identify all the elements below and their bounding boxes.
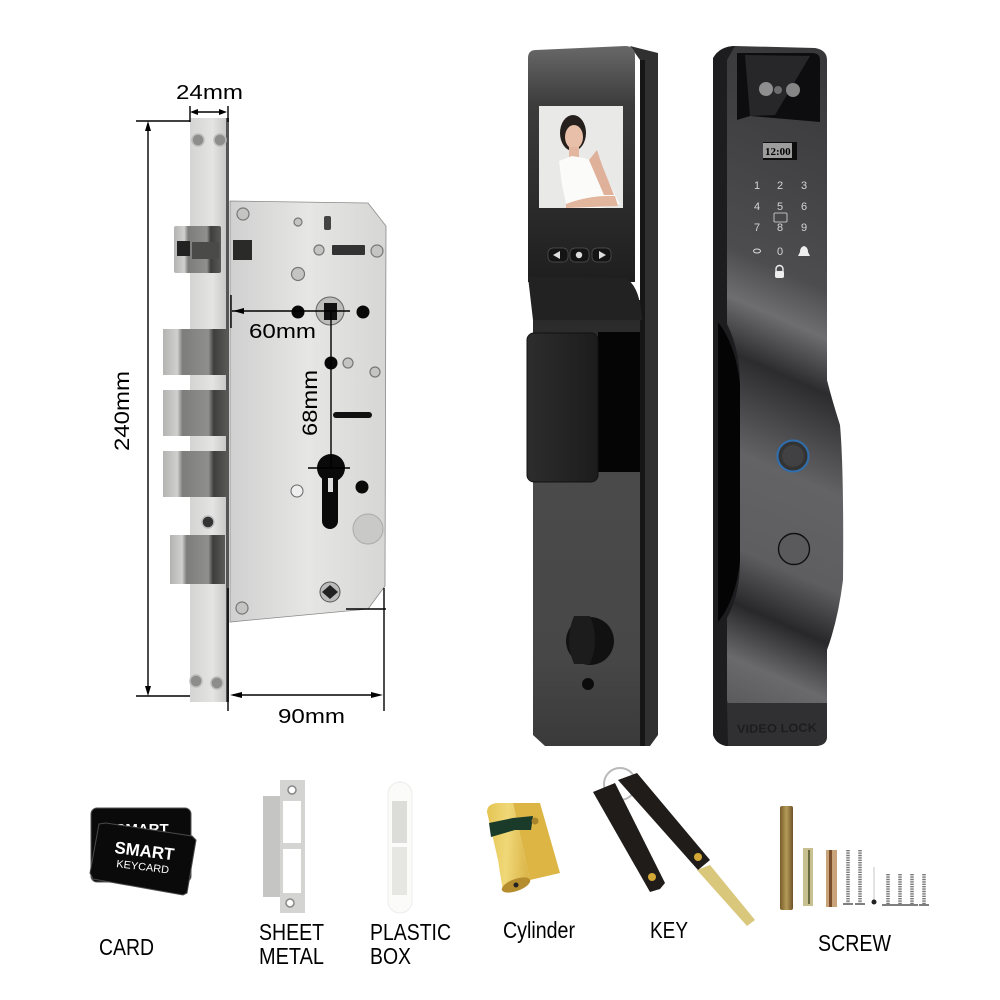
item: sheet metal strike plate bbox=[263, 780, 305, 913]
handle neck hood bbox=[528, 277, 642, 320]
label: plastic box bbox=[370, 919, 451, 969]
faceplate screws bbox=[190, 134, 226, 689]
touch keypad bbox=[754, 180, 807, 258]
key blade bbox=[697, 865, 755, 926]
case screws and openings bbox=[236, 208, 383, 614]
panel: rear lock with keypad and fingerprint bbox=[713, 46, 843, 746]
touch keypad: 1 bbox=[754, 180, 760, 192]
label: screw: SCREW bbox=[818, 930, 891, 956]
emergency keyhole bbox=[582, 678, 594, 690]
label: plastic box: BOX bbox=[370, 943, 411, 969]
lock body bbox=[716, 46, 843, 746]
clock display: 12:00 bbox=[765, 146, 791, 158]
lever handle bbox=[527, 333, 598, 482]
touch keypad: 3 bbox=[801, 180, 807, 192]
touch keypad: 2 bbox=[777, 180, 783, 192]
label: sheet metal: SHEET bbox=[259, 919, 324, 945]
thumb turn bbox=[566, 616, 614, 665]
handle shadow bbox=[598, 332, 640, 472]
top latch bbox=[174, 226, 252, 273]
brand mark: VIDEO LOCK bbox=[737, 721, 817, 736]
left edge strip bbox=[713, 46, 740, 746]
label: 240mm: 240mm bbox=[111, 371, 134, 451]
video screen with portrait bbox=[539, 106, 623, 208]
label: cylinder: Cylinder bbox=[503, 917, 575, 943]
upper screen face bbox=[528, 46, 635, 282]
label: card: CARD bbox=[99, 934, 154, 960]
panel: mortise lock body with dimensions bbox=[111, 82, 386, 728]
touch keypad: 8 bbox=[777, 222, 783, 234]
label: 24mm: 24mm bbox=[176, 82, 243, 104]
lower plate bbox=[533, 300, 640, 746]
clock display bbox=[763, 142, 797, 160]
camera window bbox=[737, 53, 820, 122]
touch keypad: 9 bbox=[801, 222, 807, 234]
label: 60mm: 60mm bbox=[249, 321, 316, 343]
dimension lines bbox=[136, 106, 386, 711]
label: sheet metal bbox=[259, 919, 324, 969]
touch keypad: 5 bbox=[777, 201, 783, 213]
icon: padlock bbox=[775, 266, 784, 278]
item: plastic box bbox=[388, 782, 412, 913]
key arms bbox=[593, 773, 710, 892]
label: 90mm: 90mm bbox=[278, 706, 345, 728]
label: key: KEY bbox=[650, 917, 688, 943]
fingerprint sensor bbox=[778, 440, 808, 472]
item: screws and rods bbox=[780, 806, 929, 910]
front card bbox=[90, 823, 196, 895]
left recess bbox=[718, 322, 740, 622]
label: sheet metal: METAL bbox=[259, 943, 324, 969]
round button bbox=[778, 534, 810, 564]
faceplate bbox=[190, 118, 228, 702]
screen navigation buttons bbox=[548, 248, 611, 262]
touch keypad: 7 bbox=[754, 222, 760, 234]
lock case bbox=[230, 201, 386, 622]
icon: doorbell bbox=[798, 246, 810, 256]
rear card: SMART bbox=[115, 821, 169, 838]
dimension arrowheads bbox=[145, 109, 383, 698]
touch keypad: 6 bbox=[801, 201, 807, 213]
panel: front lock with screen and handle bbox=[527, 46, 658, 746]
label: 68mm: 68mm bbox=[299, 370, 322, 436]
item: brass cylinder bbox=[487, 803, 560, 896]
touch keypad: 0 bbox=[777, 246, 783, 258]
front card: SMART bbox=[114, 838, 176, 864]
touch keypad: 4 bbox=[754, 201, 760, 213]
label: plastic box: PLASTIC bbox=[370, 919, 451, 945]
lock side strip bbox=[630, 46, 658, 746]
key ring bbox=[604, 768, 636, 800]
front card: KEYCARD bbox=[116, 858, 170, 876]
deadbolts bbox=[163, 329, 228, 584]
item: folding key bbox=[593, 768, 755, 926]
bottom skirt bbox=[727, 703, 827, 746]
item: smart key cards bbox=[90, 808, 196, 895]
